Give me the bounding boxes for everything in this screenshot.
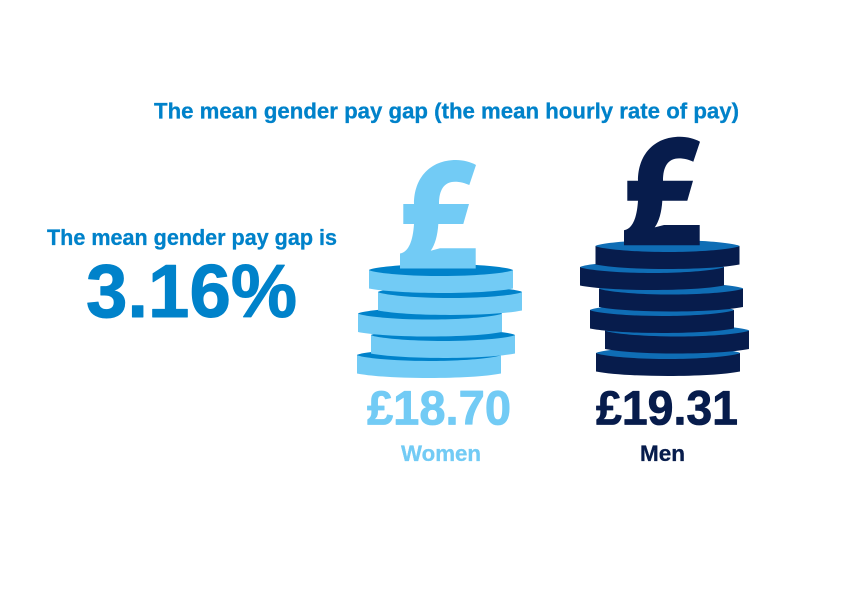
coin: men 4 bbox=[590, 304, 734, 333]
coin: women 3 bbox=[358, 308, 502, 336]
coin: men 3 bbox=[599, 282, 743, 312]
icon: light pound sign bbox=[400, 160, 476, 268]
women's pay amount: £18.70 bbox=[367, 382, 511, 436]
label: women: Women bbox=[401, 441, 481, 466]
big percentage: 3.16%: 3.16% bbox=[86, 249, 297, 333]
label: men: Men bbox=[640, 441, 685, 466]
icon: men's coin stack with pound sign bbox=[580, 137, 749, 376]
coin: men 5 bbox=[605, 324, 749, 354]
coin: women 2 bbox=[378, 286, 522, 315]
coin: men 1 bbox=[596, 240, 740, 269]
title: The mean gender pay gap (the mean hourly rate of pay) bbox=[154, 98, 739, 123]
coin: men 2 bbox=[580, 261, 724, 290]
icon: women's coin stack with pound sign bbox=[357, 160, 522, 378]
coin: women 5 bbox=[357, 349, 501, 378]
coin: women 1 bbox=[369, 264, 513, 293]
icon: dark pound sign bbox=[624, 137, 700, 245]
coin: women 4 bbox=[371, 329, 515, 358]
coin: men 6 bbox=[596, 347, 740, 376]
subheading: the mean gender pay gap is: The mean gender pay gap is bbox=[47, 225, 337, 250]
men's pay amount: £19.31 bbox=[596, 382, 738, 436]
